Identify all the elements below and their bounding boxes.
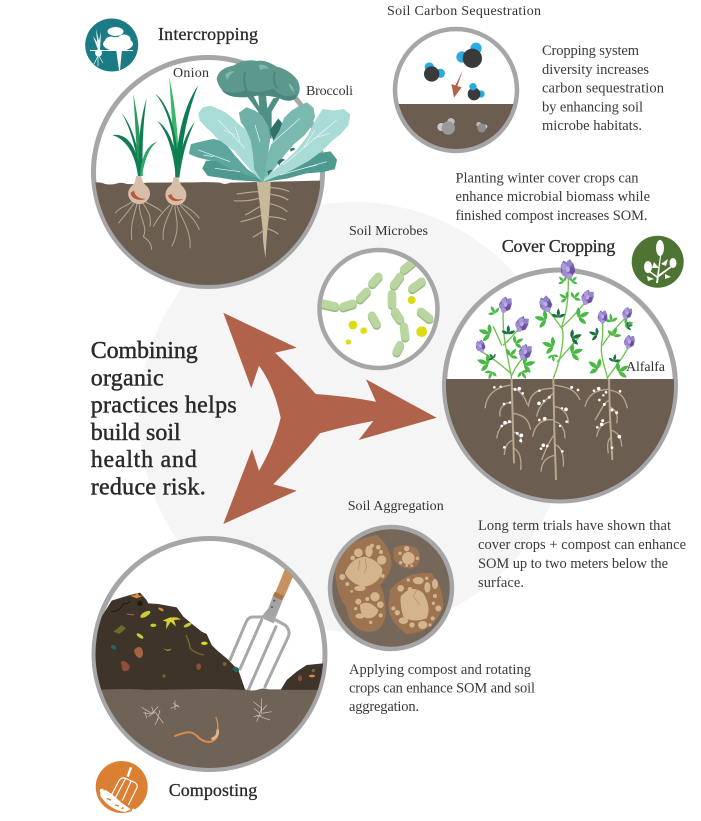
- alfalfa plants: [474, 259, 636, 480]
- onion bulbs: [128, 176, 150, 204]
- label: soil aggregation: Soil Aggregation: [348, 499, 444, 514]
- soil aggregates: [335, 535, 443, 634]
- icon: intercropping badge: [85, 18, 138, 72]
- cover cropping ring: [444, 270, 676, 501]
- text block: winter cover crops: [456, 170, 650, 224]
- heading: combining organic practices: organic: [91, 366, 164, 392]
- text block: winter cover crops: Planting winter cover crops can: [456, 170, 639, 186]
- carbon molecules: [424, 43, 487, 135]
- earthworm: [175, 717, 218, 742]
- compost pile: [93, 593, 245, 690]
- heading: combining organic practices: Combining: [91, 338, 198, 364]
- icon: cover cropping badge: [632, 236, 684, 288]
- panel: intercropping: [90, 58, 349, 290]
- panel: soil aggregation: [330, 527, 452, 649]
- alfalfa leaves: [474, 272, 634, 382]
- text block: cropping system diversity: diversity increases: [542, 62, 649, 78]
- icon: composting badge: [96, 761, 148, 813]
- onion leaves right: [155, 78, 198, 177]
- broccoli stalks: [247, 95, 281, 138]
- intercropping ring: [94, 58, 322, 286]
- background circle: [139, 202, 569, 632]
- microbe rods: [323, 262, 429, 353]
- text block: long term trials: Long term trials have shown that: [478, 518, 671, 534]
- alfalfa roots: [485, 379, 627, 480]
- alfalfa root nodules: [493, 385, 621, 453]
- label: alfalfa: Alfalfa: [626, 360, 666, 375]
- plants: onion and broccoli: [112, 78, 289, 258]
- label: onion: Onion: [173, 66, 209, 81]
- panel: soil carbon sequestration: [390, 29, 520, 164]
- heading: cover cropping: Cover Cropping: [502, 236, 615, 256]
- panel: cover cropping: [440, 259, 680, 509]
- broccoli head: [217, 60, 300, 101]
- panel: composting: [90, 538, 327, 773]
- broccoli root: [257, 182, 271, 258]
- aggregation ring: [330, 527, 452, 649]
- text block: cropping system diversity: Cropping system: [542, 43, 640, 59]
- label: broccoli: Broccoli: [306, 84, 353, 99]
- onion roots: [115, 201, 199, 250]
- arrow: three-way practices arrow: [223, 313, 437, 524]
- text block: applying compost: Applying compost and rotating: [349, 662, 531, 678]
- label: soil carbon sequestration: Soil Carbon Sequestration: [387, 4, 541, 19]
- heading: combining organic practices: practices helps: [91, 392, 237, 418]
- alfalfa stems: [482, 278, 628, 379]
- cover cropping soil: [446, 379, 674, 500]
- text block: winter cover crops: finished compost increases SOM.: [456, 208, 648, 224]
- text block: long term trials: [478, 518, 686, 591]
- text block: cropping system diversity: carbon sequestration: [542, 80, 665, 96]
- composting ring: [94, 538, 325, 770]
- text block: long term trials: surface.: [478, 575, 524, 591]
- compost debris: [110, 593, 315, 681]
- heading: composting: Composting: [169, 780, 257, 800]
- heading: combining organic practices: build soil: [91, 420, 181, 446]
- fine roots in soil: [142, 698, 272, 725]
- broccoli leaves: [190, 140, 263, 181]
- text block: cropping system diversity: microbe habitats.: [542, 118, 642, 134]
- microbes ring: [320, 250, 438, 368]
- onion leaves left: [112, 94, 157, 176]
- text block: winter cover crops: enhance microbial biomass while: [456, 189, 650, 205]
- text block: long term trials: cover crops + compost can enhance: [478, 537, 686, 553]
- heading: intercropping: Intercropping: [158, 24, 258, 44]
- heading: combining organic practices: reduce risk.: [91, 474, 206, 500]
- broccoli plant: [190, 60, 349, 181]
- compost scene: [90, 593, 327, 773]
- carbon soil: [398, 104, 514, 149]
- heading: combining organic practices: health and: [91, 447, 197, 473]
- text block: long term trials: SOM up to two meters below the: [478, 556, 668, 572]
- text block: applying compost: [349, 662, 535, 715]
- alfalfa flowers: [474, 259, 636, 363]
- panel: soil microbes: [320, 250, 438, 368]
- text block: cropping system diversity: [542, 43, 665, 134]
- garden fork: [230, 569, 294, 690]
- soil below pile: [101, 688, 318, 768]
- text block: applying compost: crops can enhance SOM and soil: [349, 680, 535, 696]
- intercropping soil: [90, 181, 320, 290]
- heading: combining organic practices: [91, 338, 237, 500]
- text block: applying compost: aggregation.: [349, 699, 419, 715]
- carbon ring: [395, 29, 517, 151]
- text block: cropping system diversity: by enhancing soil: [542, 100, 643, 116]
- label: soil microbes: Soil Microbes: [349, 224, 428, 239]
